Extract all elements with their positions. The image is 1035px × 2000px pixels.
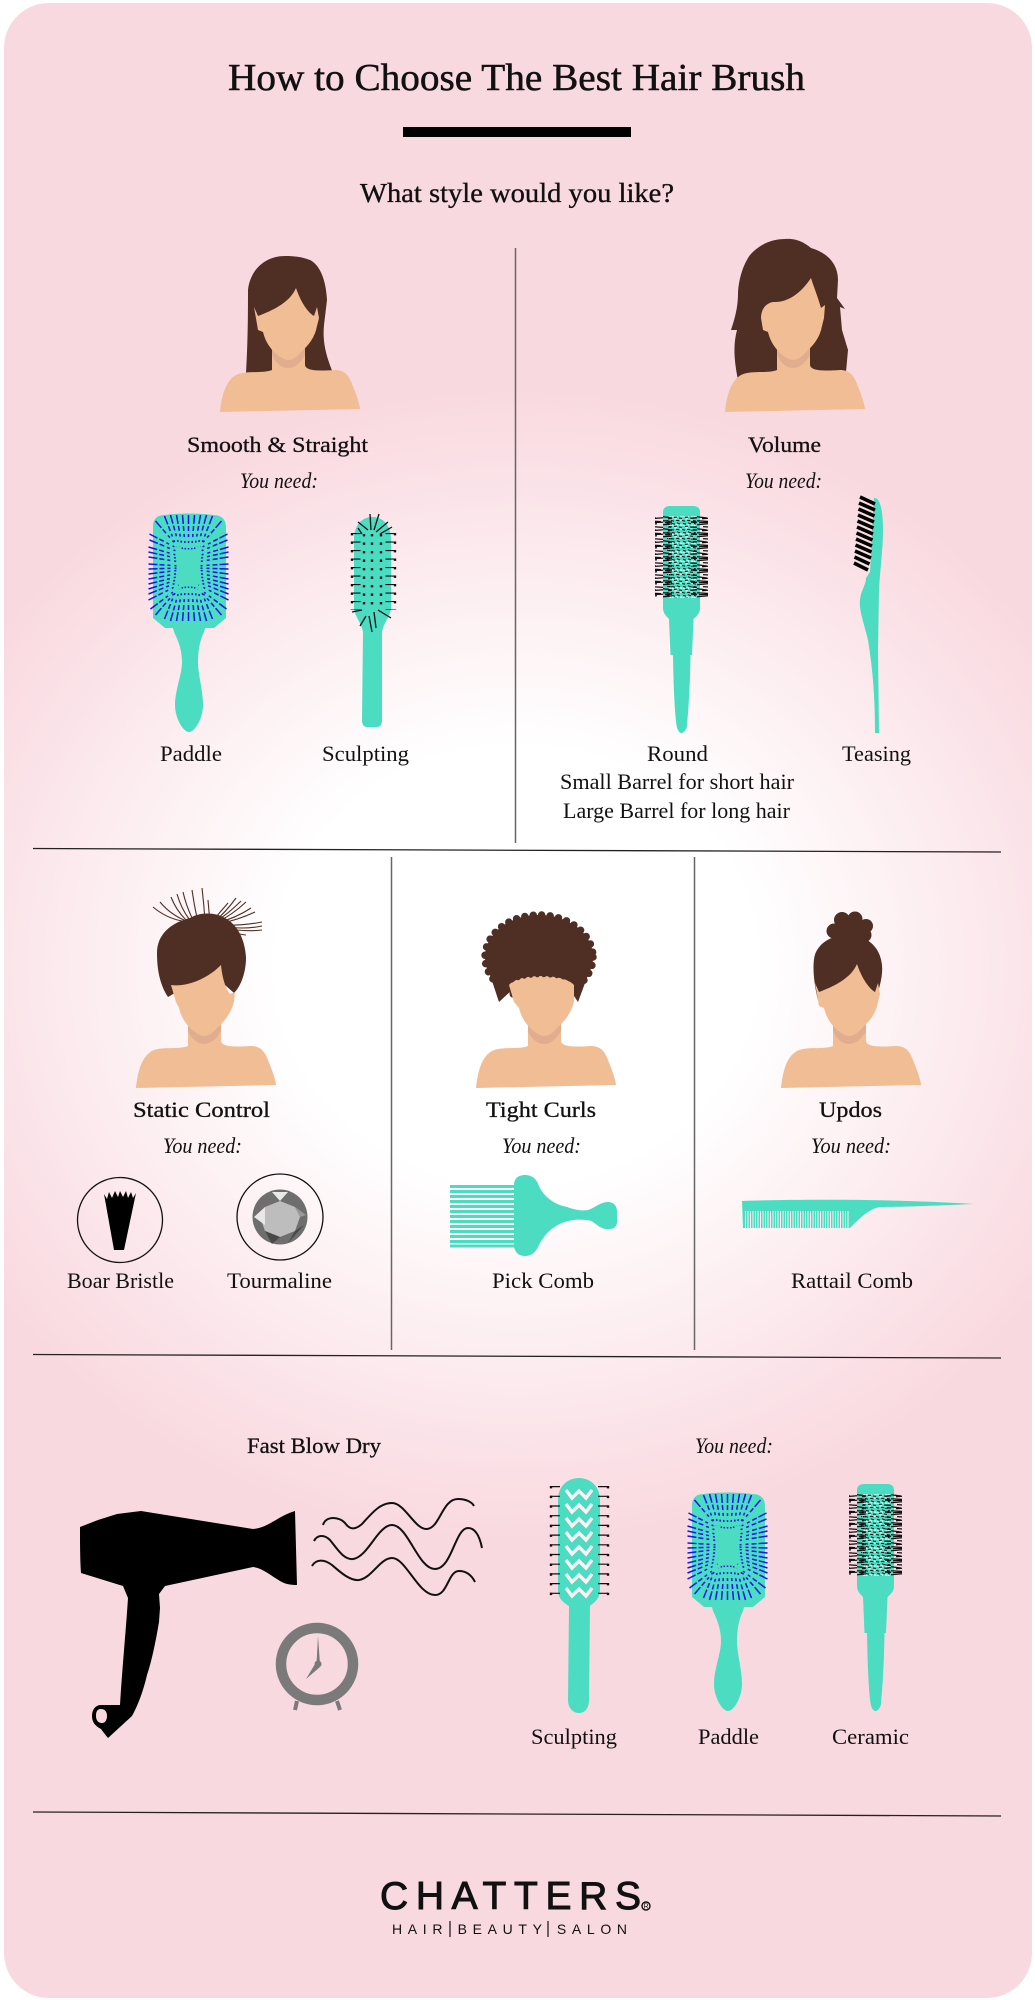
icon: boar bristle [78,1178,162,1262]
logo: chatters: CHATTERS [380,1875,641,1918]
label: pick comb: Pick Comb [492,1268,594,1293]
brush: round [655,506,708,733]
label: round: Round [647,741,708,766]
panel: smooth and straight [148,256,409,766]
logo: chatters [380,1875,650,1937]
logo: chatters: R [644,1904,649,1910]
heading: Static Control [133,1097,270,1122]
figure: straight hair [220,256,360,412]
icon: tourmaline gem [237,1174,323,1260]
title bar [403,127,631,137]
label: rattail comb: Rattail Comb [791,1268,913,1293]
icon: pick comb [450,1175,617,1256]
figure: volume hair [725,239,865,412]
label: boar bristle: Boar Bristle [67,1268,174,1293]
panel: static control [67,888,332,1293]
label: paddle: Paddle [160,741,222,766]
heading: Smooth & Straight [187,432,368,457]
label: tourmaline: Tourmaline [227,1268,332,1293]
label: teasing: Teasing [842,741,911,766]
figure: afro hair [476,915,616,1088]
you need: You need: [745,468,822,493]
heading: Tight Curls [486,1097,596,1122]
brush: sculpting [352,514,395,727]
icon: air waves [312,1499,482,1595]
icon: clock [281,1628,353,1710]
brush: paddle [688,1492,768,1711]
label: large barrel: Large Barrel for long hair [563,798,791,823]
heading: Fast Blow Dry [247,1433,381,1458]
logo: chatters: HAIR BEAUTY SALON [392,1921,627,1937]
you need: You need: [502,1133,581,1158]
brush: paddle [148,514,228,732]
title: How to Choose The Best Hair Brush [228,57,805,99]
label: paddle: Paddle [698,1724,759,1749]
subtitle: What style would you like? [360,178,674,208]
you need: You need: [811,1133,891,1158]
panel: volume [560,239,911,823]
you need: You need: [163,1133,242,1158]
label: sculpting: Sculpting [531,1724,617,1749]
label: small barrel: Small Barrel for short hair [560,769,795,794]
heading: Updos [819,1097,882,1122]
figure: static hair [136,888,276,1088]
panel: updos [742,912,974,1293]
heading: Volume [748,432,821,457]
label: sculpting: Sculpting [322,741,409,766]
you need: You need: [240,468,318,493]
icon: hair dryer [80,1511,297,1738]
label: ceramic: Ceramic [832,1724,909,1749]
figure: updo hair [781,912,921,1088]
icon: rattail comb [742,1200,974,1228]
panel: fast blow dry [80,1433,909,1749]
brush: teasing [854,497,883,733]
brush: ceramic [849,1484,902,1711]
panel: tight curls [450,915,617,1293]
brush: sculpting vent [551,1478,608,1713]
you need: You need: [695,1433,773,1458]
